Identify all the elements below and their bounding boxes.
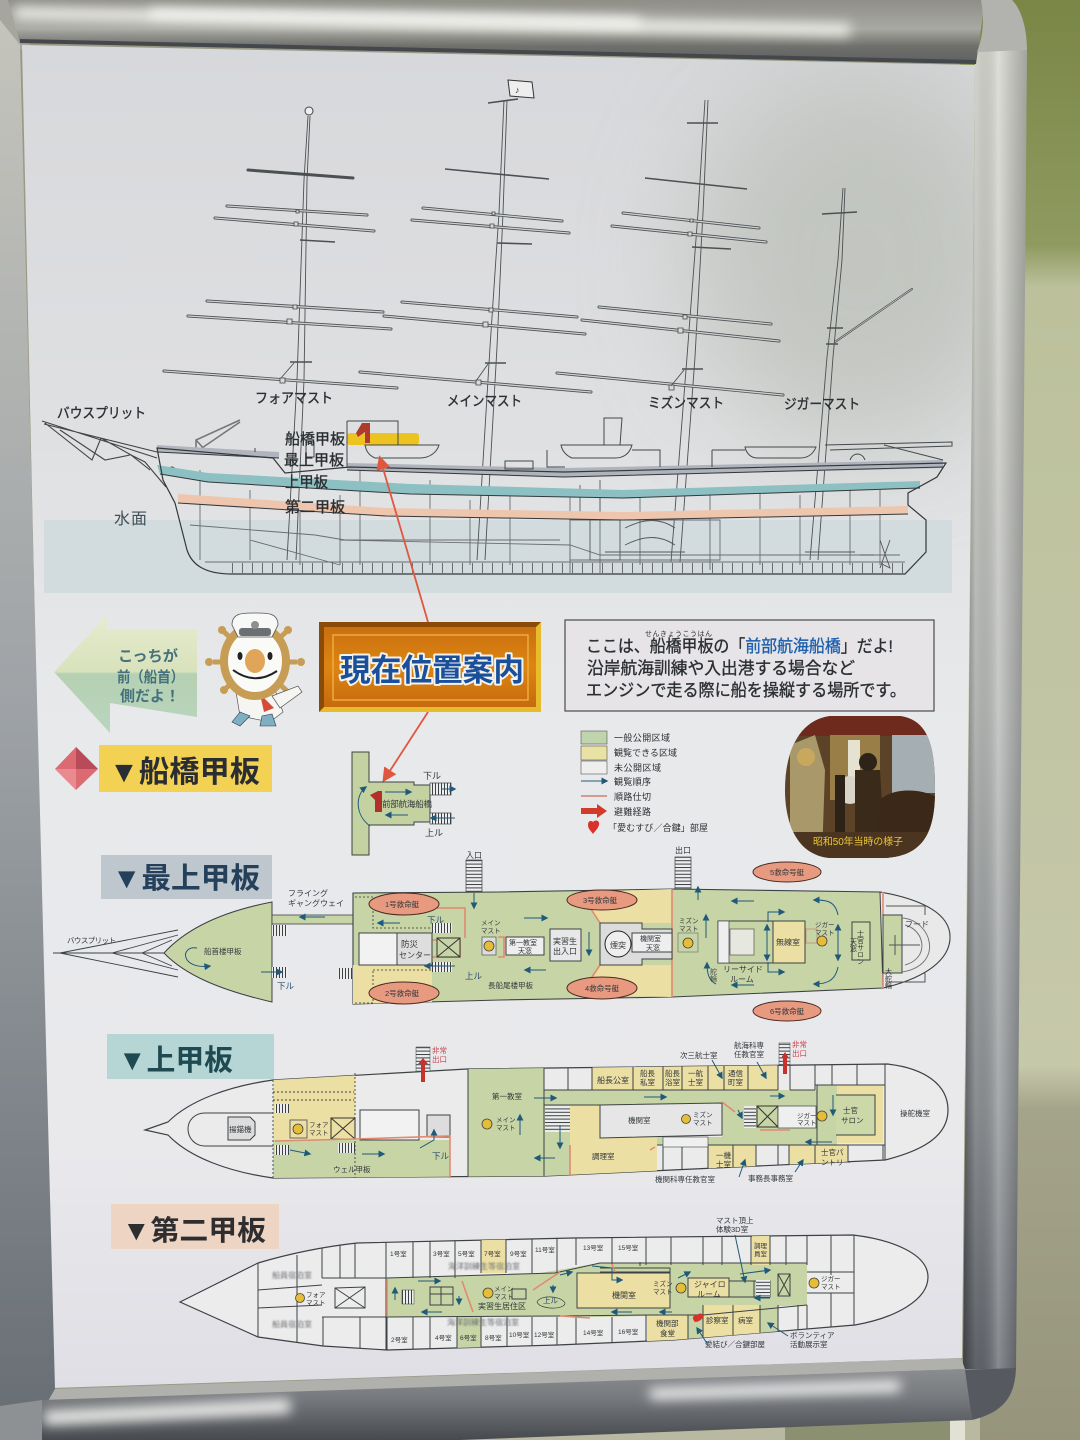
classroom skylight: 第一教室	[509, 938, 537, 947]
hull	[145, 1064, 948, 1178]
deck lines	[157, 452, 943, 520]
classroom skylight	[506, 937, 544, 955]
hull outline	[157, 448, 946, 574]
mizzen mast	[678, 916, 698, 952]
deck labels	[67, 888, 717, 991]
legend	[581, 731, 708, 834]
room labels: 11号室	[535, 1245, 555, 1254]
room labels: 14号室	[583, 1328, 604, 1337]
room labels: 浴室	[665, 1077, 680, 1087]
legend: closed area: 未公開区域	[614, 762, 661, 773]
room labels: ントリー	[821, 1158, 851, 1167]
route dividers	[432, 889, 883, 997]
well deck structure: ウェル甲板	[333, 1164, 371, 1174]
stern white area	[880, 892, 950, 988]
label: water surface: 水面	[114, 510, 147, 528]
label: top deck: 最上甲板	[284, 452, 344, 469]
route arrows	[186, 887, 838, 985]
engine casing: 煙突	[610, 941, 626, 950]
room labels: 8号室	[485, 1333, 502, 1342]
masts: マスト	[821, 1283, 840, 1291]
furigana: せんきょうこうはん	[645, 630, 712, 638]
room labels: 士官パ	[821, 1147, 844, 1157]
deck labels: 下ル	[427, 915, 445, 925]
legend: evacuation route: 避難経路	[614, 806, 651, 817]
masts: マスト	[653, 1288, 672, 1296]
engine room	[600, 1103, 722, 1138]
deck labels: フライング	[288, 888, 328, 898]
well deck structure	[273, 1073, 522, 1178]
well deck structure: 第一教室	[492, 1091, 522, 1101]
bowsprit lines	[53, 930, 178, 977]
green rooms	[457, 1306, 778, 1348]
inner forecastle	[188, 1113, 273, 1146]
lifeboat labels: 2号救命艇	[385, 988, 420, 998]
room labels: 操舵機室	[900, 1108, 930, 1118]
engine room: ミズン	[693, 1110, 712, 1119]
plan: upper deck	[145, 1039, 948, 1184]
room labels: 実習生居住区	[478, 1301, 526, 1311]
arrow: bow direction	[54, 615, 197, 733]
deck band: top grey	[347, 460, 943, 477]
deck band: foredeck grey	[157, 445, 279, 458]
classroom skylight: 天窓	[518, 946, 532, 955]
well deck structure: フォア	[309, 1121, 329, 1129]
room labels: ジガー	[797, 1111, 816, 1120]
background wall	[960, 0, 1080, 1440]
gangway	[272, 915, 353, 924]
engine casing: 天窓	[646, 943, 660, 952]
room labels: 5号室	[458, 1249, 475, 1258]
label: second deck: 第二甲板	[285, 499, 345, 516]
room labels: 事務長事務室	[748, 1173, 793, 1183]
emergency exits: 非常	[432, 1045, 447, 1055]
dotted partitions	[355, 897, 432, 1003]
mast: mizzen	[557, 100, 783, 562]
plan: second deck	[180, 1216, 928, 1352]
icon: red diamond	[55, 747, 98, 790]
label: upper deck: 上甲板	[285, 474, 328, 491]
room labels: 船長公室	[597, 1075, 629, 1085]
frame bottom right corner	[965, 1368, 1016, 1420]
bow deck	[164, 902, 272, 1002]
icon: key room heart	[693, 1314, 703, 1322]
cadet entrance	[550, 929, 581, 961]
deck labels: 長船尾楼甲板	[488, 980, 533, 990]
line 2: 沿岸航海訓練や入出港する場合など	[587, 659, 855, 678]
room labels: 6号室	[460, 1333, 477, 1342]
heading: upper deck: ▼上甲板	[118, 1044, 233, 1077]
room labels: マスト	[797, 1119, 816, 1127]
fire prevention centre: 防災	[401, 939, 419, 949]
bowsprit	[42, 421, 175, 487]
line 3: エンジンで走る際に船を操縦する場所です。	[586, 681, 906, 700]
frame bottom	[42, 1358, 972, 1440]
fire prevention centre: センター	[399, 951, 431, 960]
room labels: 航海科専	[734, 1040, 764, 1050]
plan: top deck	[53, 845, 950, 1021]
figure marker	[370, 791, 382, 812]
arrow text	[117, 647, 184, 705]
main mast: メイン	[481, 920, 500, 927]
masts	[296, 1274, 840, 1307]
room labels: 町室	[728, 1077, 743, 1087]
room labels: 食堂	[660, 1328, 675, 1338]
heading: second deck	[111, 1204, 279, 1249]
superstructure	[255, 418, 952, 469]
well deck structure: マスト	[309, 1129, 328, 1137]
room labels: 調理	[754, 1242, 768, 1250]
well deck structure: メイン	[496, 1117, 516, 1124]
line 1: ここは、船橋甲板の「前部航海船橋」だよ!	[586, 637, 893, 656]
mascot hat	[232, 613, 278, 637]
room labels: 士官	[843, 1105, 858, 1115]
plan labels: 前部航海船橋	[382, 799, 432, 809]
room labels	[272, 1216, 835, 1349]
room labels: 15号室	[618, 1243, 639, 1252]
route arrows	[290, 1060, 833, 1177]
arrow text: こっちが	[118, 647, 178, 665]
masts: マスト	[494, 1293, 514, 1301]
lee side room: 無線室	[776, 937, 800, 947]
engine casing	[600, 923, 672, 965]
mast: main: ♪	[515, 85, 520, 95]
room labels: 調理室	[592, 1151, 615, 1161]
emergency exits: 出口	[432, 1054, 447, 1064]
stairs: entrance and exit: 入口	[466, 851, 482, 860]
room labels: 海洋訓練生等宿泊室	[447, 1317, 519, 1327]
frame right	[963, 48, 1027, 1370]
room labels: 7号室	[484, 1249, 501, 1258]
label: fore mast: フォアマスト	[255, 390, 333, 406]
officer salon skylight	[850, 922, 870, 965]
room dividers	[258, 1235, 854, 1352]
plan labels	[382, 771, 443, 838]
photo caption: 昭和50年当時の様子	[813, 835, 903, 848]
masts: ミズン	[653, 1279, 672, 1288]
well deck structure: 下ル	[432, 1151, 450, 1161]
photo: bridge in Showa 50	[785, 716, 935, 858]
room labels: 上ル	[543, 1296, 558, 1305]
cadet entrance: 出入口	[553, 946, 577, 956]
stairs at bow	[272, 925, 353, 979]
heading: bridge deck	[55, 745, 272, 792]
label: bridge deck: 船橋甲板	[285, 431, 345, 448]
masts: メイン	[494, 1286, 514, 1293]
route arrows	[395, 1235, 788, 1345]
stern hood	[883, 906, 930, 990]
room labels: 員室	[754, 1249, 768, 1258]
hull interior structure	[190, 470, 905, 573]
room labels: 4号室	[435, 1333, 452, 1342]
jigger mast	[806, 920, 834, 946]
mast: jigger	[810, 188, 912, 560]
room labels: 士室	[716, 1159, 731, 1169]
room labels: 13号室	[583, 1243, 604, 1252]
lee side room: ルーム	[730, 975, 754, 984]
masts: フォア	[306, 1291, 326, 1299]
label: jigger mast: ジガーマスト	[784, 396, 860, 412]
arrow: location sign to bridge plan	[384, 712, 428, 780]
lifeboat labels: 4救命号艇	[585, 983, 620, 993]
room labels: 3号室	[433, 1249, 450, 1258]
figure: current position	[356, 423, 370, 443]
room labels: 10号室	[509, 1330, 530, 1339]
room labels: 機関室	[612, 1290, 636, 1300]
lifeboats	[369, 862, 821, 1021]
stairs oval	[537, 1297, 565, 1308]
masts: マスト	[306, 1299, 326, 1307]
heading: upper deck	[107, 1034, 274, 1079]
officer salon skylight: 天窓	[850, 938, 857, 952]
emergency exits	[416, 1039, 807, 1082]
main deck shape	[353, 889, 950, 1004]
room labels: 私室	[640, 1077, 655, 1087]
legend: route divider: 順路仕切	[614, 791, 651, 802]
room labels: 任教官室	[734, 1049, 764, 1059]
frame top	[8, 0, 985, 64]
jigger mast: ジガー	[815, 920, 834, 929]
room labels: 機関部	[656, 1318, 679, 1328]
room labels: 船長	[665, 1068, 680, 1078]
room labels: 12号室	[534, 1330, 555, 1339]
cadet entrance: 実習生	[553, 936, 577, 946]
room labels: ジャイロ	[694, 1280, 726, 1289]
room labels: 船長	[640, 1068, 655, 1078]
rooms	[468, 1060, 885, 1180]
arrow text: 前（船首）	[117, 668, 184, 686]
mascot: ship wheel character	[205, 613, 305, 726]
plan labels: 上ル	[425, 828, 443, 838]
room labels: 病室	[738, 1315, 753, 1325]
plan: bridge deck	[352, 752, 455, 855]
heading: bridge deck: ▼船橋甲板	[109, 756, 260, 789]
fire prevention centre	[359, 933, 432, 965]
deck labels: バウスプリット	[67, 936, 116, 945]
hull	[180, 1235, 928, 1350]
room labels: ボランティア	[790, 1331, 835, 1340]
lifeboat labels	[385, 867, 805, 1016]
heading: top deck: ▼最上甲板	[112, 862, 260, 895]
route dividers	[387, 1264, 615, 1318]
room labels: 次三航士室	[680, 1050, 718, 1060]
engine casing: 機関室	[640, 934, 661, 943]
room labels: 海洋訓練生等宿泊室	[448, 1261, 520, 1271]
ship side elevation	[42, 80, 952, 593]
crane	[196, 420, 240, 450]
water surface	[44, 520, 952, 593]
emergency exits: 出口	[792, 1048, 807, 1058]
explanation box	[565, 620, 934, 711]
room labels: 船員宿泊室	[272, 1319, 312, 1329]
label: mizzen mast: ミズンマスト	[648, 395, 724, 411]
room labels: 機関科専任教官室	[655, 1174, 715, 1184]
room labels: 一航	[688, 1068, 703, 1078]
mizzen mast: ミズン	[679, 916, 698, 925]
room labels: 士室	[688, 1077, 703, 1087]
lifeboat labels: 1号救命艇	[385, 899, 420, 909]
engine room: マスト	[693, 1119, 712, 1127]
yellow zones	[353, 889, 805, 1004]
legend: viewing order: 観覧順序	[614, 776, 651, 787]
plan labels: 下ル	[423, 771, 441, 781]
room labels: 通信	[728, 1068, 743, 1078]
arrow text: 側だよ！	[120, 688, 180, 705]
room labels: 2号室	[391, 1335, 408, 1344]
stern hood: 大舵輪	[884, 967, 892, 990]
location sign	[319, 622, 541, 712]
main mast: マスト	[481, 927, 500, 935]
room labels: マスト頂上	[716, 1216, 754, 1225]
heading: second deck: ▼第二甲板	[122, 1215, 266, 1246]
lee side room	[718, 921, 805, 984]
mascot face	[238, 652, 242, 660]
arrow: ship to location sign	[380, 458, 428, 622]
main mast	[481, 920, 500, 955]
mast: main	[360, 80, 591, 560]
coloured zones	[273, 1063, 883, 1180]
inner forecastle: 揚錨機	[229, 1124, 252, 1134]
room labels: 16号室	[618, 1327, 639, 1336]
room labels: 診察室	[706, 1315, 729, 1325]
legend: public area: 一般公開区域	[614, 732, 670, 743]
deck labels: ギャングウェイ	[288, 898, 344, 908]
deck band: upper teal	[157, 465, 920, 498]
mizzen mast: マスト	[679, 925, 698, 933]
emergency exits: 非常	[792, 1039, 807, 1049]
deck labels: 上ル	[465, 971, 483, 981]
lifeboat labels: 3号救命艇	[583, 895, 618, 905]
legend: viewable area: 観覧できる区域	[614, 747, 677, 758]
room labels: サロン	[841, 1116, 864, 1125]
room labels: ルーム	[697, 1290, 721, 1299]
green corridor	[387, 1263, 807, 1317]
hatch	[437, 938, 460, 957]
masts: ジガー	[821, 1274, 840, 1283]
room labels: 9号室	[510, 1249, 527, 1258]
deck labels: 下ル	[277, 981, 295, 991]
lifeboat labels: 5救命号艇	[770, 867, 805, 877]
room labels	[592, 1040, 930, 1184]
officer salon skylight: 士官サロン	[856, 929, 864, 965]
stairs: entrance and exit	[432, 845, 691, 972]
frame top right corner	[977, 0, 1027, 52]
room labels: 愛結び／合鍵部屋	[705, 1339, 765, 1349]
stairs	[402, 1280, 770, 1305]
well deck structure: マスト	[496, 1124, 516, 1132]
stairs: entrance and exit: 出口	[675, 845, 691, 855]
deck labels: 船首楼甲板	[204, 946, 242, 956]
deck band: second orange	[178, 494, 908, 520]
lee side room: リーサイド	[723, 965, 763, 974]
room labels: 活動展示室	[790, 1339, 828, 1349]
sign text: 現在位置案内	[340, 653, 524, 688]
frame left bottom cap	[0, 1400, 42, 1440]
mast: fore	[164, 107, 397, 560]
label: main mast: メインマスト	[447, 393, 522, 409]
room labels: 1号室	[390, 1249, 407, 1258]
label: bowsprit: バウスプリット	[57, 405, 146, 421]
room labels: 一機	[716, 1150, 731, 1160]
frame left	[0, 20, 55, 1408]
room labels: 船員宿泊室	[272, 1270, 312, 1280]
legend: key room: 「愛むすび／合鍵」部屋	[608, 822, 708, 833]
engine room: 機関室	[628, 1115, 651, 1125]
lifeboat labels: 6号救命艇	[770, 1006, 805, 1016]
stern hood: フード	[905, 920, 929, 929]
deck band: bridge yellow	[347, 433, 419, 445]
mascot body	[236, 690, 283, 722]
yellow rooms	[481, 1234, 770, 1342]
deck labels: 舵輪	[710, 967, 717, 983]
heading: top deck	[101, 855, 272, 899]
room labels: 体験3D室	[716, 1224, 749, 1234]
jigger mast: マスト	[815, 929, 834, 937]
